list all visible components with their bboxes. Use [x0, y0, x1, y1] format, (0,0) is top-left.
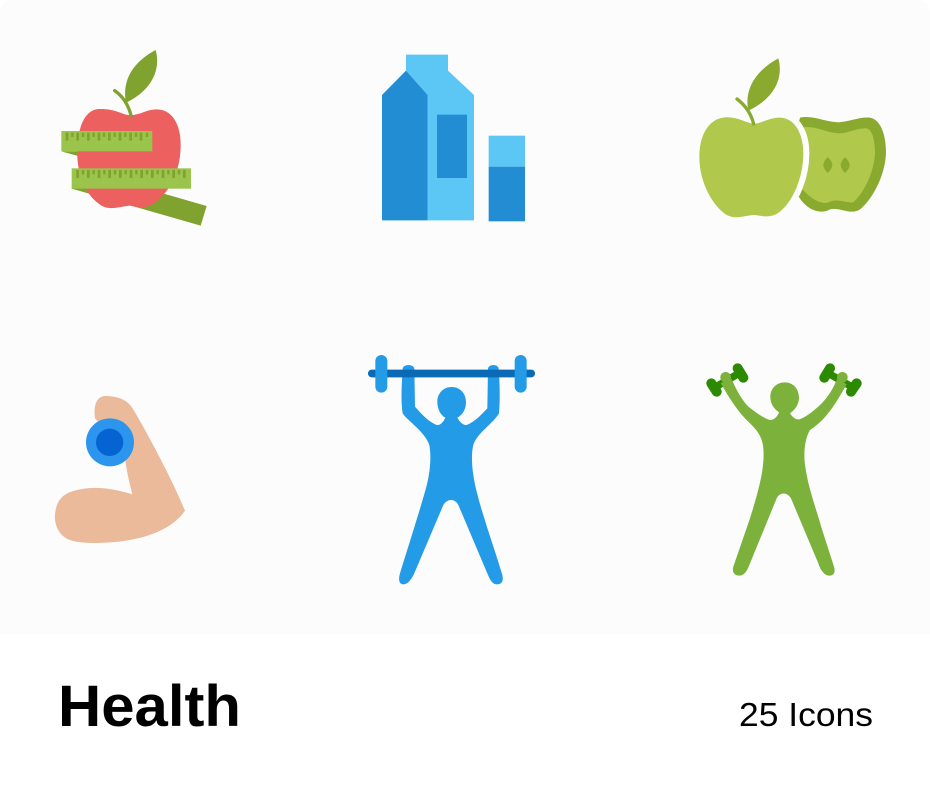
icon: figure exercising with dumbbells — [711, 368, 857, 576]
text: icon count: 25 Icons — [739, 696, 873, 733]
icon: green apple with slice — [699, 58, 886, 217]
heading: Health: Health — [58, 674, 241, 739]
icon: milk carton and glass — [382, 55, 525, 221]
icon: weightlifter with barbell — [368, 355, 535, 584]
infographic canvas — [54, 50, 886, 726]
icon: flexed arm with dumbbell — [55, 396, 185, 543]
icon: apple with measuring tape — [61, 50, 207, 226]
